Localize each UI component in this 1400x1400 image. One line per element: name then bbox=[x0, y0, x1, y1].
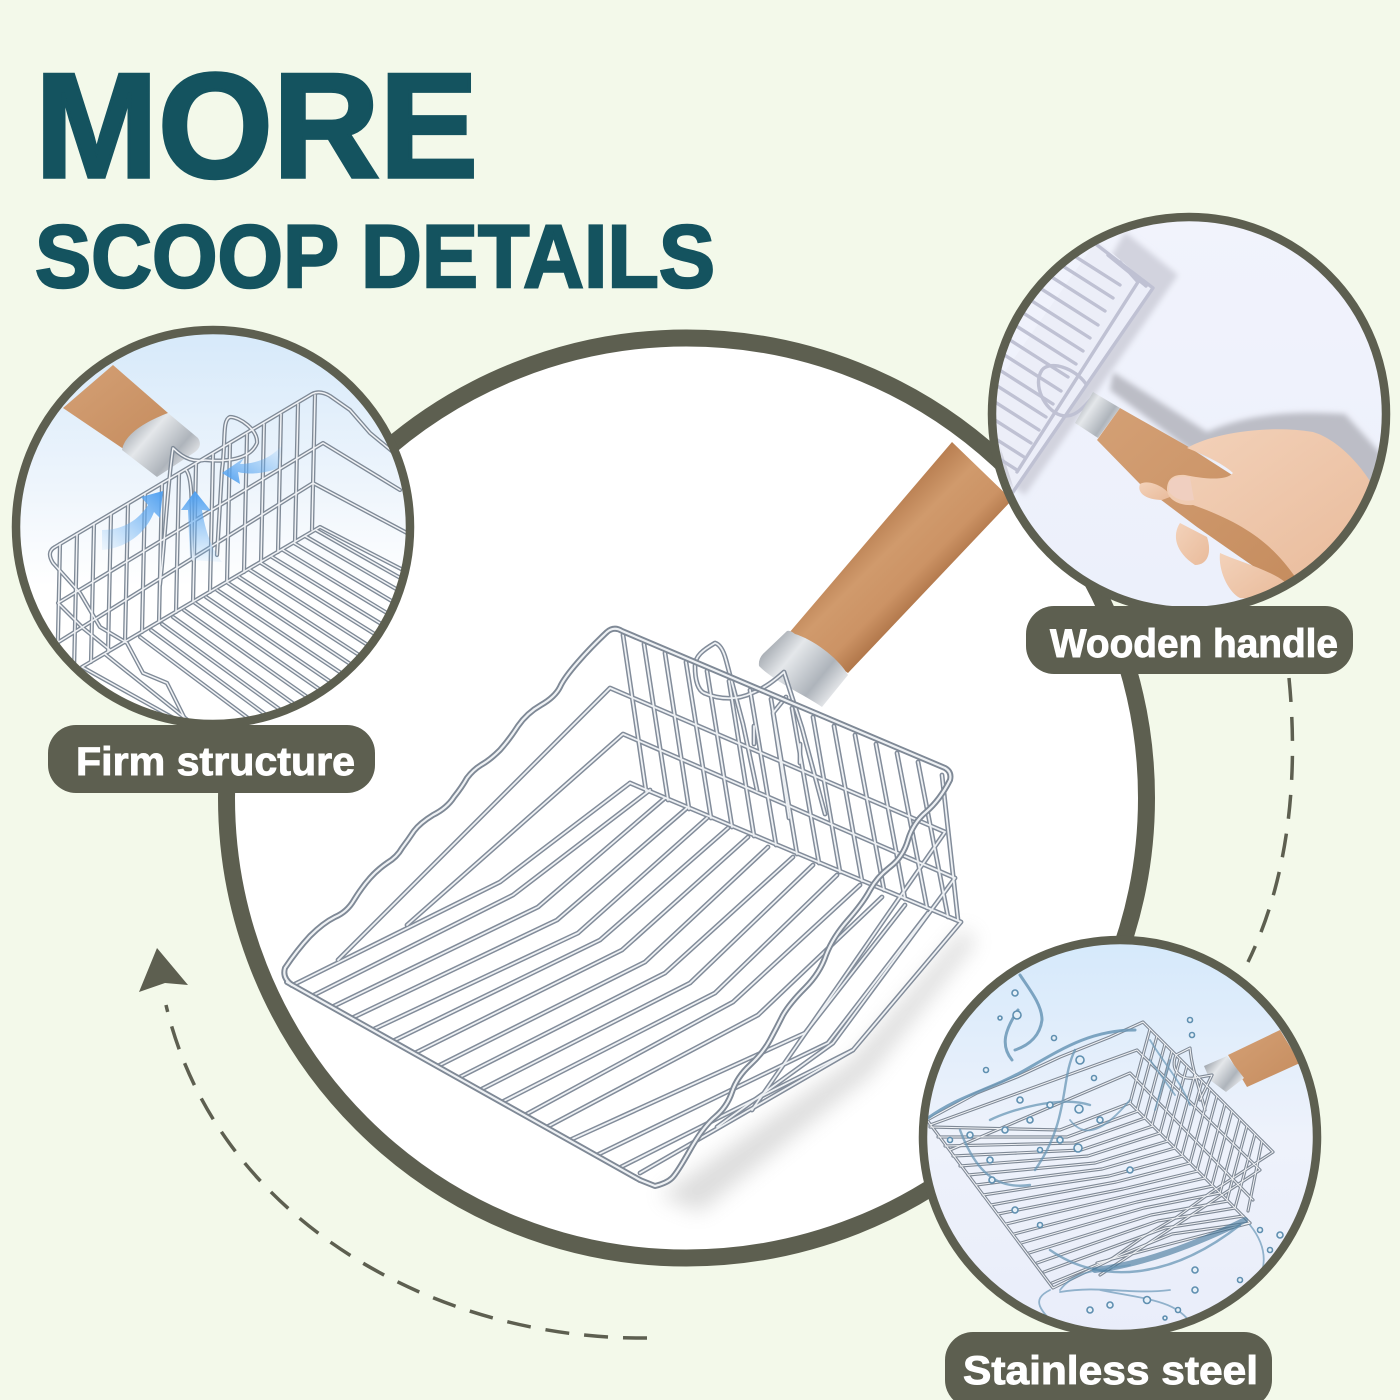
water droplets bbox=[948, 990, 1283, 1320]
title: SCOOP DETAILS bbox=[35, 206, 715, 306]
panel: stainless steel detail bbox=[923, 940, 1317, 1334]
detail wires bbox=[48, 390, 406, 718]
label: stainless steel bbox=[945, 1332, 1272, 1400]
finger behind handle bbox=[1139, 482, 1170, 500]
arrow: blue left bbox=[102, 491, 163, 550]
middle finger bbox=[1176, 523, 1209, 565]
thumbnail and creases bbox=[1169, 477, 1194, 501]
wire basket bbox=[284, 629, 961, 1186]
label: firm structure bbox=[48, 725, 375, 793]
label: firm structure: Firm structure bbox=[76, 740, 355, 784]
label: wooden handle bbox=[1026, 606, 1353, 674]
scoop shadow bbox=[990, 232, 1178, 495]
label: stainless steel: Stainless steel bbox=[963, 1349, 1258, 1393]
title bbox=[35, 42, 715, 306]
detail collar bbox=[122, 413, 200, 477]
detail wooden handle bbox=[63, 365, 168, 450]
wooden handle bbox=[789, 442, 1012, 673]
hand bbox=[1139, 429, 1375, 598]
hand shadow bbox=[1110, 372, 1382, 490]
main circle bbox=[226, 338, 1146, 1258]
main scoop product bbox=[284, 442, 1012, 1212]
arrow: blue right bbox=[222, 445, 282, 484]
palm and thumb bbox=[1167, 429, 1375, 578]
little finger bbox=[1220, 553, 1285, 598]
detail wood handle bbox=[1228, 1030, 1300, 1087]
arrow: blue middle bbox=[181, 491, 222, 562]
scoop shadow bbox=[660, 928, 975, 1212]
handle wood bbox=[1097, 408, 1300, 590]
arrow: dashed curve right bbox=[1248, 678, 1292, 962]
handle collar bbox=[1075, 392, 1120, 438]
panel: wooden handle detail bbox=[988, 212, 1390, 606]
detail collar bbox=[1204, 1056, 1244, 1092]
detail wires bbox=[927, 1022, 1273, 1288]
label: wooden handle: Wooden handle bbox=[1050, 622, 1338, 666]
panel: firm structure detail bbox=[12, 326, 414, 725]
metal collar bbox=[759, 631, 848, 707]
mini basket bbox=[1001, 254, 1150, 488]
arrow: dashed curve left bbox=[139, 948, 647, 1338]
water splash bbox=[928, 975, 1264, 1330]
title: MORE bbox=[35, 42, 478, 209]
